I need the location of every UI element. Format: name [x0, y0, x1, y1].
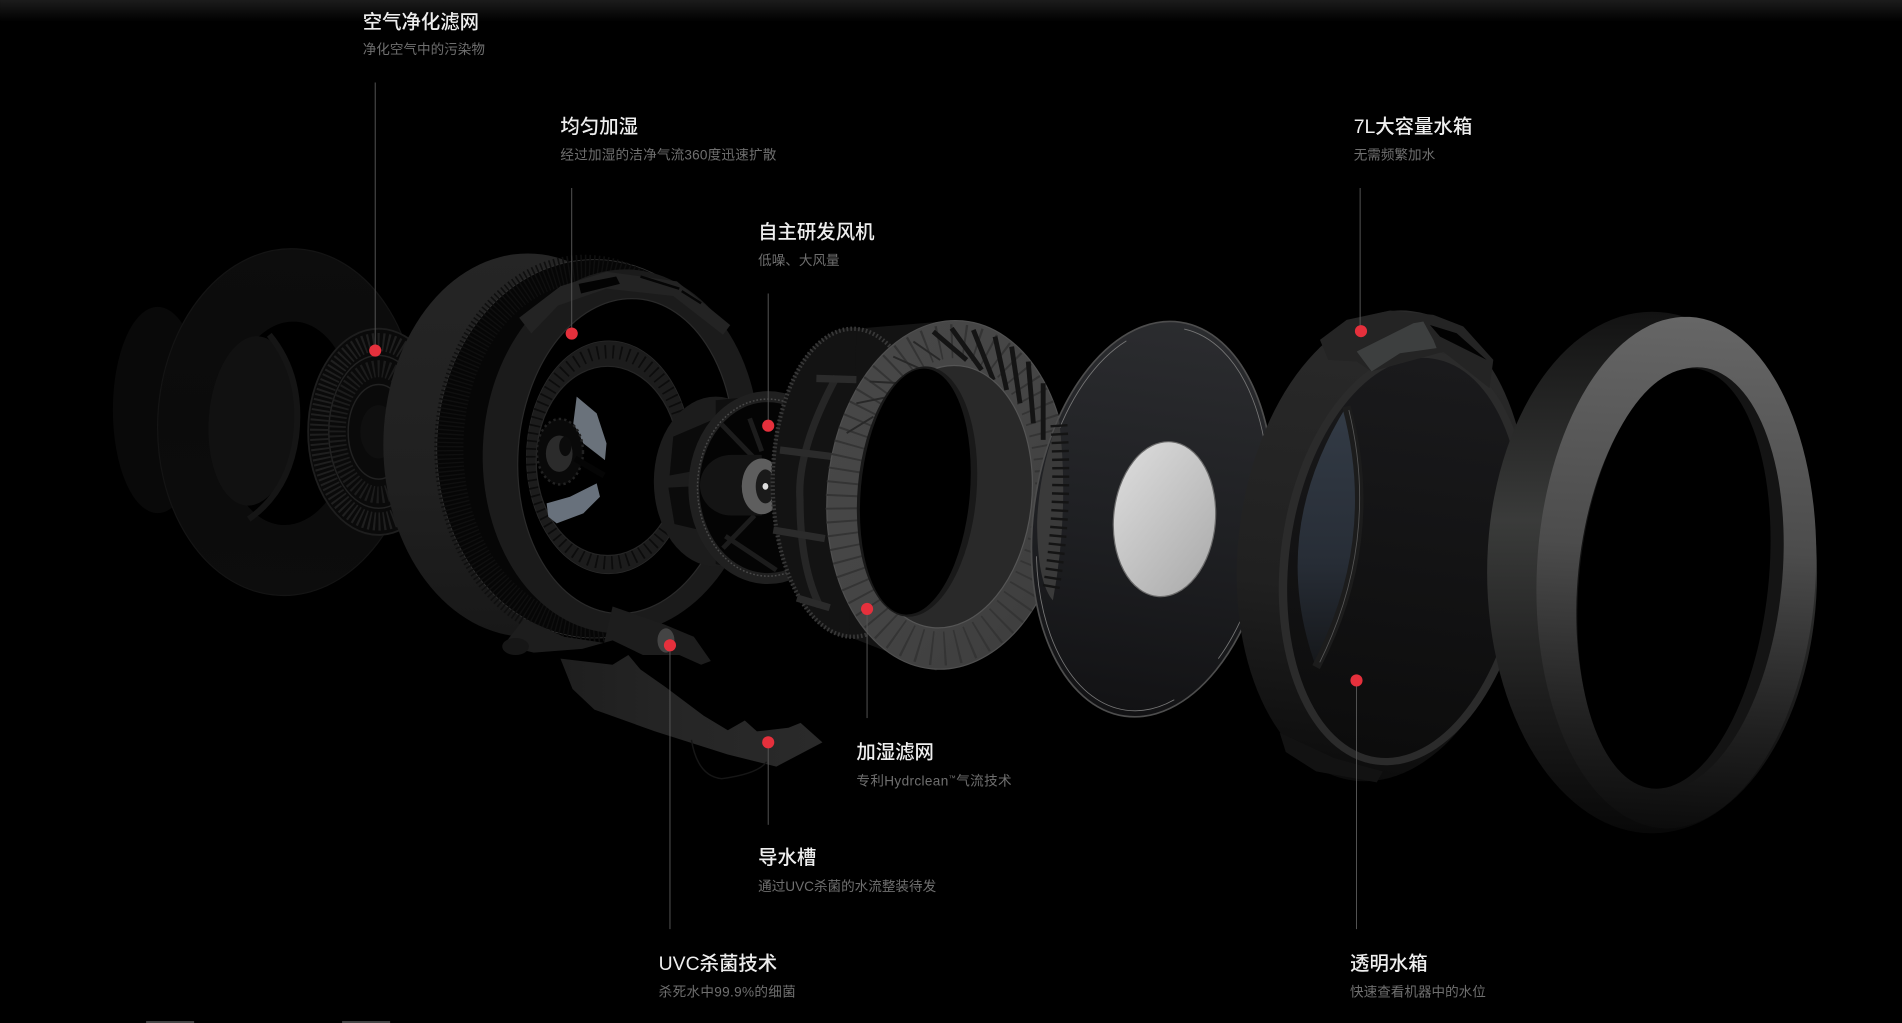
blade face — [813, 310, 1082, 679]
side frame — [771, 320, 958, 671]
part: back cover — [113, 242, 426, 602]
callout: 7L大容量水箱 — [1354, 116, 1472, 337]
inner turbine ring — [526, 341, 691, 574]
part: air purification filter — [308, 329, 449, 535]
blades seen through glass — [1037, 418, 1063, 600]
part: front ring — [1487, 310, 1829, 835]
callout: 透明水箱 — [1350, 674, 1486, 999]
callout: 空气净化滤网 — [363, 12, 485, 357]
callout: 自主研发风机: 自主研发风机 — [758, 221, 875, 243]
part: main housing — [383, 254, 769, 640]
fan blades — [547, 397, 607, 523]
bottom tab — [1280, 733, 1401, 782]
part: humidifying filter — [771, 310, 1082, 679]
top handle — [1320, 311, 1493, 388]
white disc — [1107, 437, 1222, 601]
callout: 加湿滤网 — [856, 603, 1012, 788]
callout: 空气净化滤网: 净化空气中的污染物 — [363, 42, 485, 57]
callout: 自主研发风机: 低噪、大风量 — [758, 253, 840, 268]
callout: 空气净化滤网: 空气净化滤网 — [363, 12, 479, 34]
callout: 透明水箱: 快速查看机器中的水位 — [1350, 984, 1486, 999]
callout: 均匀加湿 — [560, 116, 777, 340]
callout: UVC杀菌技术: 杀死水中99.9%的细菌 — [659, 984, 796, 999]
fan hub — [537, 419, 604, 484]
callout: 自主研发风机 — [758, 221, 875, 432]
callout: 导水槽: 通过UVC杀菌的水流整装待发 — [758, 879, 937, 894]
callout: 均匀加湿: 经过加湿的洁净气流360度迅速扩散 — [560, 148, 777, 163]
callout: 导水槽 — [758, 736, 937, 894]
level window — [1298, 406, 1359, 667]
callout: 均匀加湿: 均匀加湿 — [560, 116, 638, 138]
callout: UVC杀菌技术 — [659, 639, 796, 999]
callout: 加湿滤网: 加湿滤网 — [856, 742, 934, 764]
callout: 导水槽: 导水槽 — [758, 847, 816, 869]
part: water trough — [560, 655, 822, 779]
callout: 7L大容量水箱: 无需频繁加水 — [1354, 148, 1436, 163]
part: transparent water tank — [1211, 293, 1556, 798]
callout: 加湿滤网: 专利Hydrclean — [856, 773, 948, 788]
bottom edge tabs — [146, 1021, 390, 1023]
top shadow band — [0, 0, 1902, 22]
callout: 7L大容量水箱: 7L大容量水箱 — [1354, 116, 1472, 138]
callout: 加湿滤网: ™ — [949, 774, 956, 783]
motor — [700, 455, 782, 516]
part: UVC bracket — [502, 606, 711, 665]
callout: 加湿滤网: 气流技术 — [956, 773, 1012, 788]
part: centrifugal fan — [654, 395, 842, 580]
callout: UVC杀菌技术: UVC杀菌技术 — [659, 953, 777, 975]
callout: 透明水箱: 透明水箱 — [1350, 953, 1428, 975]
part: glass disc — [1007, 306, 1298, 733]
